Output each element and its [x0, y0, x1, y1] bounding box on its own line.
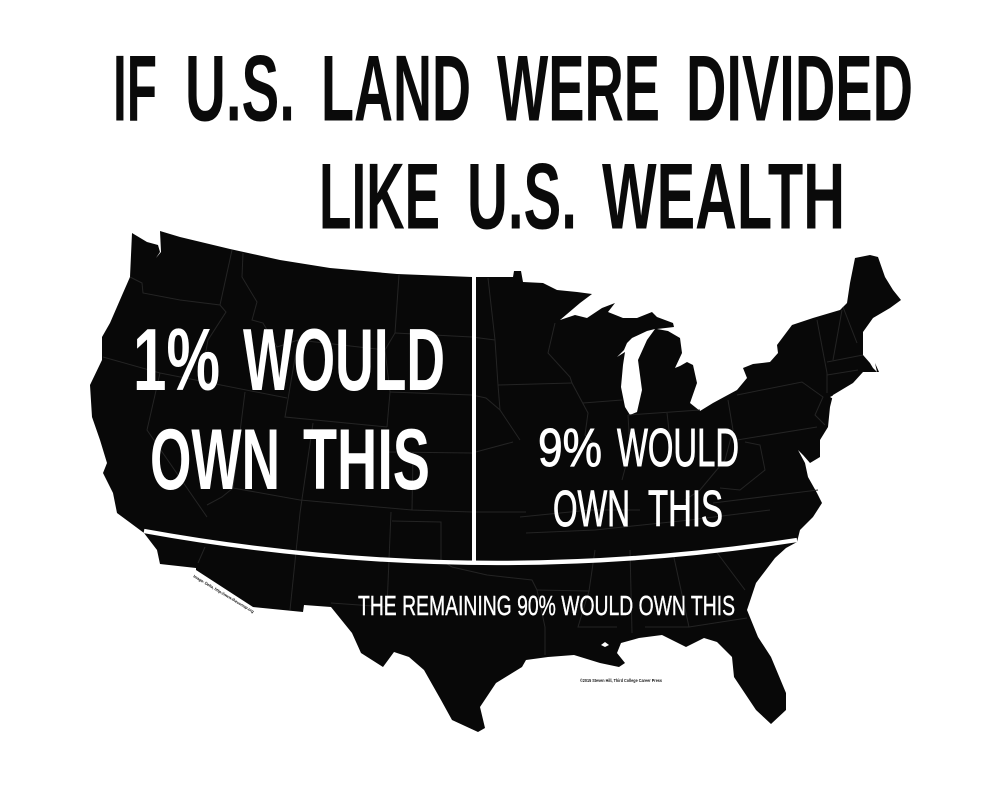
- title: WERE: [497, 36, 660, 140]
- title: IF: [113, 36, 157, 140]
- label: 1% would own this: OWN: [150, 412, 280, 508]
- label: 9% would own this: THIS: [648, 480, 723, 537]
- label: 9% would own this: 9%: [538, 418, 602, 478]
- title: WEALTH: [602, 144, 845, 248]
- label: 1% would own this: 1%: [133, 310, 220, 409]
- copyright note: ©2015 Steven Hill, Third College Career Press: [580, 677, 662, 683]
- map silhouette: [90, 231, 901, 732]
- title: [113, 36, 913, 248]
- label: remaining 90% would own this: THE REMAINING 90% WOULD OWN THIS: [358, 590, 735, 621]
- title: LAND: [321, 36, 471, 140]
- label: 1% would own this: WOULD: [243, 310, 445, 409]
- label: 1% would own this: [133, 310, 445, 508]
- label: 9% would own this: [538, 418, 739, 537]
- divider line: 90% boundary: [144, 531, 797, 563]
- Lake Michigan: [617, 329, 655, 415]
- label: 9% would own this: OWN: [553, 480, 630, 537]
- title: U.S.: [185, 36, 295, 140]
- map of the contiguous United States: [90, 231, 901, 732]
- title: U.S.: [467, 144, 577, 248]
- divider line: 1% / 9% boundary: [472, 277, 476, 561]
- label: 9% would own this: WOULD: [617, 418, 739, 478]
- map image credit: Image: Delta, http://www.theusmap.org: [192, 574, 256, 614]
- title: LIKE: [319, 144, 440, 248]
- label: 1% would own this: THIS: [303, 412, 430, 508]
- Long Island Sound: [830, 386, 855, 400]
- Lake Pontchartrain: [601, 642, 609, 647]
- state borders: [103, 250, 863, 655]
